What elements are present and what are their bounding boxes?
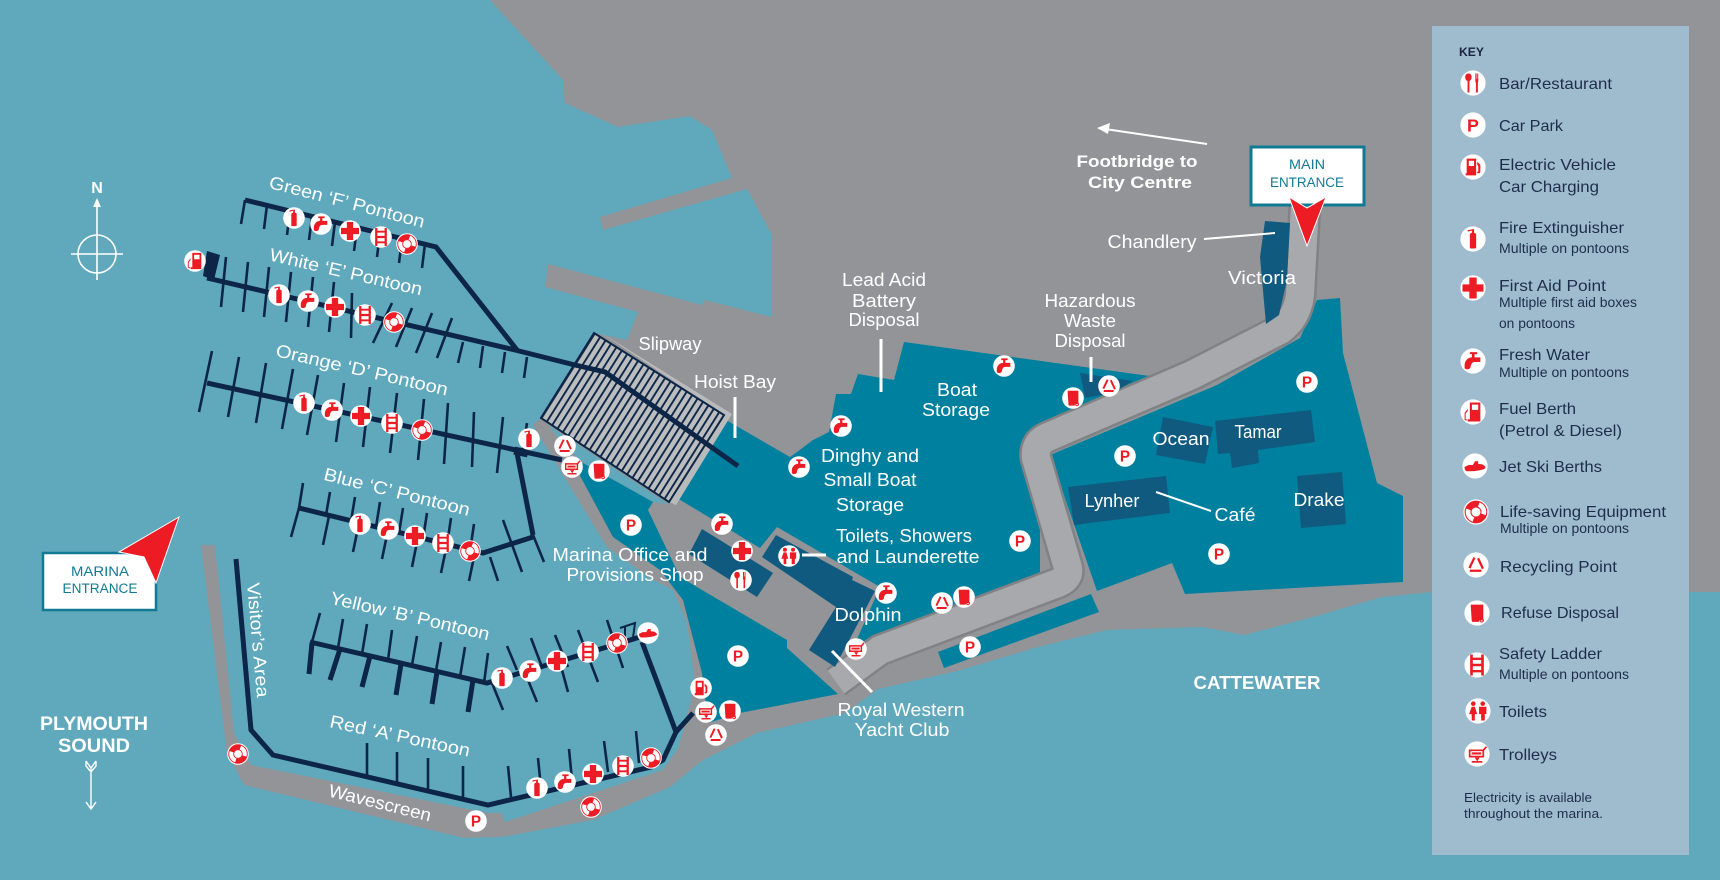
icon: fire extinguisher F [283, 207, 305, 229]
pontoon A and visitor's area [236, 559, 693, 805]
key: bar/restaurant: Bar/Restaurant [1499, 76, 1613, 93]
icon: EV charging [690, 677, 712, 699]
pontoon labels: Red ‘A’ Pontoon [328, 711, 472, 761]
slipway edge [600, 332, 732, 505]
key: toilets [1465, 698, 1547, 724]
boat storage area [677, 342, 1157, 655]
place labels: Waste [1064, 311, 1116, 331]
icon: water hoist [788, 456, 810, 478]
key: fuel berth: Fuel Berth [1499, 401, 1576, 418]
marina entrance box [43, 553, 156, 610]
place labels: Dinghy and [821, 446, 919, 466]
cattewater label: CATTEWATER [1194, 673, 1320, 693]
icon: water dinghy [830, 415, 852, 437]
key: refuse: Refuse Disposal [1501, 605, 1619, 622]
buildings [689, 221, 1346, 667]
footbridge label: Footbridge to [1076, 152, 1198, 171]
key: first aid: on pontoons [1499, 316, 1575, 331]
key heading: KEY [1459, 45, 1484, 59]
icon: refuse south [719, 700, 741, 722]
key: bar/restaurant [1460, 70, 1613, 96]
icon: life-saving wavescreen west [227, 743, 249, 765]
slipway hatch [541, 333, 724, 502]
icon: recycling side [554, 435, 576, 457]
map icons [184, 207, 1318, 832]
footbridge arrow [1097, 123, 1207, 144]
place labels: Provisions Shop [566, 565, 704, 585]
icon: first aid B [546, 650, 568, 672]
icon: car park south [727, 645, 749, 667]
icon: first aid E [324, 296, 346, 318]
icon: water B [519, 660, 541, 682]
marina entrance box: ENTRANCE [62, 581, 138, 596]
icon: recycling south [705, 724, 727, 746]
key: fresh water [1460, 347, 1629, 380]
key: safety ladder [1464, 646, 1629, 682]
place labels: Boat [937, 380, 977, 400]
place labels: Storage [836, 495, 904, 515]
icon: fire extinguisher side [518, 428, 540, 450]
key: recycling [1463, 552, 1618, 578]
place labels: Royal Western [838, 700, 964, 720]
key: first aid [1460, 275, 1637, 331]
panel: key [1432, 26, 1689, 855]
icon: water office [711, 513, 733, 535]
pontoon E [203, 251, 738, 466]
key: trolleys [1464, 741, 1557, 767]
key: refuse [1464, 600, 1619, 626]
icon: trolley dolphin [845, 638, 867, 660]
icon: recycling road [931, 592, 953, 614]
icon: life-saving D [411, 419, 433, 441]
icon: ladder A [612, 755, 634, 777]
pontoon labels [243, 172, 492, 825]
icon: car park cafe [1208, 543, 1230, 565]
place labels: Café [1214, 505, 1256, 525]
key: jet ski [1462, 453, 1602, 479]
place labels: Small Boat [824, 470, 916, 490]
footbridge label: City Centre [1088, 173, 1192, 192]
key: EV charging: Electric Vehicle [1499, 157, 1616, 174]
icon: car park wavescreen [465, 810, 487, 832]
key: fresh water: Multiple on pontoons [1499, 365, 1629, 380]
icon: life-saving C [459, 540, 481, 562]
icon: life-saving wavescreen east [580, 796, 602, 818]
place labels: Slipway [638, 334, 702, 354]
leader lines [735, 233, 1275, 692]
key: jet ski: Jet Ski Berths [1499, 459, 1602, 476]
icon: water F [310, 213, 332, 235]
icon: fire extinguisher A [526, 777, 548, 799]
icon: first aid A [582, 763, 604, 785]
place labels: Marina Office and [552, 545, 708, 565]
icon: first aid F [339, 220, 361, 242]
road [836, 205, 1305, 682]
place labels: Toilets, Showers [836, 526, 972, 546]
key: fire extinguisher: Fire Extinguisher [1499, 220, 1625, 237]
compass [71, 180, 123, 280]
plymouth sound label: PLYMOUTH [40, 714, 148, 735]
icon: trolley side [561, 456, 583, 478]
icon: first aid C [404, 525, 426, 547]
place labels: Chandlery [1108, 232, 1196, 252]
place labels [552, 232, 1344, 740]
plymouth sound label [40, 714, 148, 757]
key: fire extinguisher [1460, 220, 1629, 256]
icon: water D [321, 399, 343, 421]
icon: first aid office [731, 540, 753, 562]
key: first aid: First Aid Point [1499, 278, 1607, 295]
icon: water C [377, 518, 399, 540]
icon: water E [297, 290, 319, 312]
icon: trolley south [695, 701, 717, 723]
water strip beside slipway [548, 425, 668, 504]
icon: fire extinguisher C [349, 513, 371, 535]
pontoon B [309, 613, 640, 712]
key: fuel berth: (Petrol & Diesel) [1499, 423, 1622, 440]
footbridge label [1076, 152, 1198, 192]
icon: car park east [1296, 371, 1318, 393]
key: life-saving: Multiple on pontoons [1500, 521, 1629, 536]
pontoon F [241, 200, 517, 350]
main entrance box: ENTRANCE [1270, 175, 1344, 190]
place labels: Lead Acid [842, 270, 926, 290]
place labels: Ocean [1152, 429, 1210, 449]
icon: life-saving B [606, 632, 628, 654]
pontoon labels: Green ‘F’ Pontoon [267, 172, 427, 232]
icon: refuse road [953, 586, 975, 608]
icon: refuse hazardous [1062, 387, 1084, 409]
key: car park [1460, 112, 1564, 138]
icon: toilets [778, 545, 800, 567]
icon: life-saving F [396, 233, 418, 255]
icon: water A [554, 771, 576, 793]
icon: fire extinguisher B [491, 667, 513, 689]
icon: water boat storage [993, 355, 1015, 377]
key: fire extinguisher: Multiple on pontoons [1499, 241, 1629, 256]
icon: car park storage [1009, 530, 1031, 552]
key note [1464, 791, 1603, 821]
marina office car park area [578, 463, 838, 723]
place labels: Drake [1294, 490, 1344, 510]
key note: throughout the marina. [1464, 807, 1603, 821]
key: life-saving: Life-saving Equipment [1500, 504, 1667, 521]
place labels: Dolphin [834, 605, 902, 625]
pontoon labels: Yellow ‘B’ Pontoon [328, 588, 492, 644]
key: life-saving [1463, 499, 1667, 536]
icon: jet ski [637, 622, 659, 644]
pontoon labels: White ‘E’ Pontoon [268, 245, 424, 299]
key: EV charging [1460, 154, 1616, 196]
place labels: and Launderette [836, 547, 980, 567]
icon: ladder C [432, 532, 454, 554]
key: EV charging: Car Charging [1499, 179, 1599, 196]
icon: fire extinguisher E [268, 284, 290, 306]
pontoon labels: Visitor’s Area [243, 582, 273, 699]
pontoon D [199, 351, 562, 535]
key: trolleys: Trolleys [1499, 747, 1557, 764]
pontoon C [291, 483, 544, 581]
parking strip [938, 594, 1099, 668]
key: recycling: Recycling Point [1500, 559, 1618, 576]
place labels: Tamar [1234, 422, 1282, 442]
icon: water dolphin [875, 582, 897, 604]
key note: Electricity is available [1464, 791, 1592, 805]
place labels: Victoria [1228, 268, 1297, 288]
place labels: Disposal [848, 310, 920, 330]
key: car park: Car Park [1499, 118, 1564, 135]
key: safety ladder: Safety Ladder [1499, 646, 1603, 663]
pontoon labels: Blue ‘C’ Pontoon [322, 464, 472, 520]
pontoon labels: Orange ‘D’ Pontoon [274, 340, 450, 400]
icon: fire extinguisher D [293, 392, 315, 414]
place labels: Yacht Club [854, 720, 950, 740]
main entrance box [1251, 147, 1364, 205]
icon: fuel berth [184, 250, 206, 272]
icon: ladder F [370, 226, 392, 248]
icon: first aid D [350, 405, 372, 427]
icon: car park strip [959, 636, 981, 658]
icon: ladder D [381, 412, 403, 434]
plymouth sound arrow [86, 761, 96, 809]
key: fuel berth [1460, 399, 1622, 440]
icon: life-saving E [383, 311, 405, 333]
place labels: Disposal [1054, 331, 1126, 351]
key: toilets: Toilets [1499, 704, 1547, 721]
icon: ladder B [577, 641, 599, 663]
icon: life-saving A [640, 747, 662, 769]
marina entrance box: MARINA [71, 564, 129, 579]
place labels: Storage [922, 400, 990, 420]
compass: N [91, 180, 103, 197]
place labels: Battery [852, 291, 916, 311]
place labels: Hoist Bay [694, 372, 776, 392]
key: safety ladder: Multiple on pontoons [1499, 667, 1629, 682]
key: first aid: Multiple first aid boxes [1499, 295, 1637, 310]
main entrance box: MAIN [1289, 157, 1325, 172]
pontoon labels: Wavescreen [327, 781, 433, 825]
icon: bar restaurant [730, 569, 752, 591]
icon: recycling hazardous [1098, 375, 1120, 397]
icon: refuse side [588, 460, 610, 482]
marina entrance arrow [119, 517, 179, 583]
icon: car park office [620, 514, 642, 536]
east area [1050, 298, 1403, 594]
place labels: Lynher [1084, 491, 1140, 511]
icon: ladder E [354, 304, 376, 326]
plymouth sound label: SOUND [58, 736, 130, 757]
place labels: Hazardous [1044, 291, 1136, 311]
main entrance arrow [1289, 197, 1326, 246]
icon: car park ocean [1114, 445, 1136, 467]
key: fresh water: Fresh Water [1499, 347, 1591, 364]
